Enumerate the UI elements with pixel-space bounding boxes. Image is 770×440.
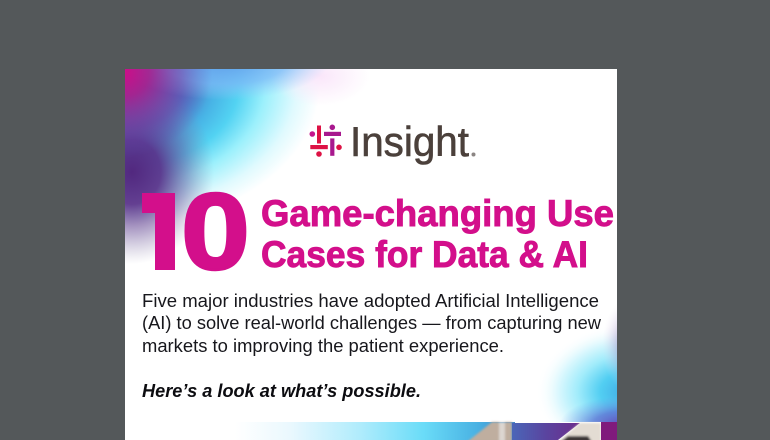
logo wordmark: Insight [350, 118, 469, 165]
intro line 2: (AI) to solve real-world challenges — from capturing new [142, 313, 602, 333]
heading [261, 193, 614, 275]
photo fragment: left [467, 422, 512, 440]
infographic canvas [125, 69, 617, 440]
logo mark [310, 124, 342, 157]
big number 10 [142, 192, 246, 272]
gradient blob: top left [125, 69, 354, 260]
white panel [125, 69, 617, 440]
logo dot [472, 152, 476, 156]
gradient blob: lower right [546, 312, 617, 422]
digit 0: 0 [181, 171, 250, 293]
magenta band [601, 422, 617, 440]
bottom image strip [235, 422, 617, 440]
logo: Insight [310, 118, 476, 165]
heading line 1: Game-changing Use [261, 193, 614, 234]
photo fragment: right [558, 423, 601, 440]
call to action line: Here’s a look at what’s possible. [142, 381, 421, 401]
purple band [512, 423, 580, 440]
intro line 3: markets to improving the patient experience. [142, 336, 504, 356]
digit 1: 1 [127, 171, 189, 296]
heading line 2: Cases for Data & AI [261, 234, 588, 275]
intro line 1: Five major industries have adopted Artificial Intelligence [142, 291, 599, 311]
intro paragraph [142, 291, 602, 356]
